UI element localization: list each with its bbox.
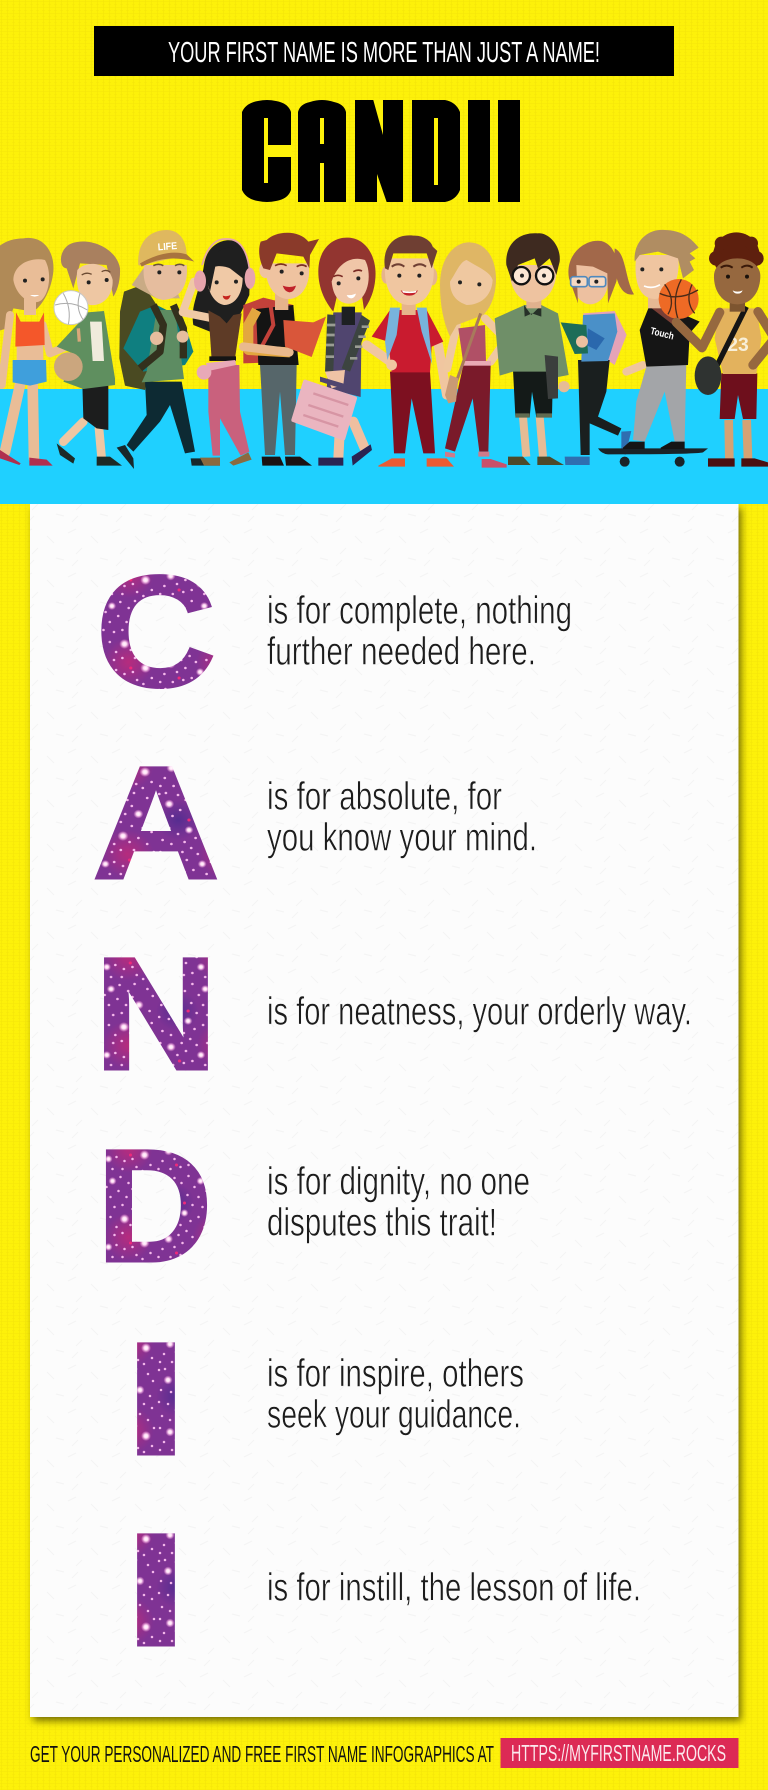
definition A: is for absolute, for bbox=[267, 776, 502, 818]
person: hiker with cap and backpack: LIFE bbox=[157, 241, 178, 253]
person: hiker with cap and backpack bbox=[117, 230, 220, 469]
person: boy in yellow tank bbox=[676, 232, 768, 467]
people group right bbox=[495, 230, 768, 467]
definition A: you know your mind. bbox=[267, 816, 537, 860]
letter I second: I bbox=[124, 1501, 188, 1680]
person: girl with volleyball bbox=[54, 241, 122, 466]
definition D: is for dignity, no one bbox=[267, 1160, 530, 1204]
letter I: I bbox=[124, 1310, 188, 1489]
people group left bbox=[0, 230, 255, 469]
row: letter D bbox=[97, 1116, 530, 1295]
person: blonde girl bbox=[440, 242, 507, 468]
definition I: is for inspire, others bbox=[267, 1352, 524, 1396]
illustration: row of young people bbox=[0, 230, 768, 469]
cyan floor band bbox=[0, 389, 768, 504]
panel: white letter card bbox=[30, 504, 738, 1717]
letter C: C bbox=[96, 544, 216, 720]
person: boy in yellow tank: 23 bbox=[727, 335, 749, 356]
person: girl with headphones bbox=[183, 239, 255, 466]
definition C: further needed here. bbox=[267, 630, 536, 674]
letter A: A bbox=[92, 733, 220, 912]
row: letter A bbox=[92, 733, 537, 912]
person: boy in red tee bbox=[367, 235, 454, 467]
definition I second: is for instill, the lesson of life. bbox=[267, 1566, 641, 1610]
people group centre bbox=[243, 233, 507, 468]
person: boy with glasses bbox=[495, 233, 570, 465]
person: boy with book bbox=[243, 233, 326, 466]
letter D: D bbox=[97, 1116, 212, 1295]
definition A bbox=[267, 776, 537, 860]
row: letter C bbox=[96, 544, 572, 720]
title: name: CANDII bbox=[247, 90, 516, 222]
definition I: seek your guidance. bbox=[267, 1394, 521, 1436]
definition I bbox=[267, 1352, 524, 1436]
definition D bbox=[267, 1160, 530, 1244]
person: girl with blue glasses and tablet bbox=[561, 241, 634, 465]
letter N: N bbox=[94, 925, 218, 1104]
definition C: is for complete, nothing bbox=[267, 590, 572, 632]
row: letter N bbox=[94, 925, 692, 1104]
person: skater with basketball bbox=[598, 230, 708, 467]
row: letter I bbox=[124, 1310, 524, 1489]
row: second letter I bbox=[124, 1501, 641, 1680]
definition D: disputes this trait! bbox=[267, 1202, 497, 1244]
tagline banner bbox=[94, 26, 674, 76]
definition C bbox=[267, 590, 572, 674]
person: girl with pink bag bbox=[293, 238, 376, 466]
person: girl in orange top bbox=[0, 238, 78, 466]
person: skater with basketball: Touch bbox=[649, 326, 675, 342]
